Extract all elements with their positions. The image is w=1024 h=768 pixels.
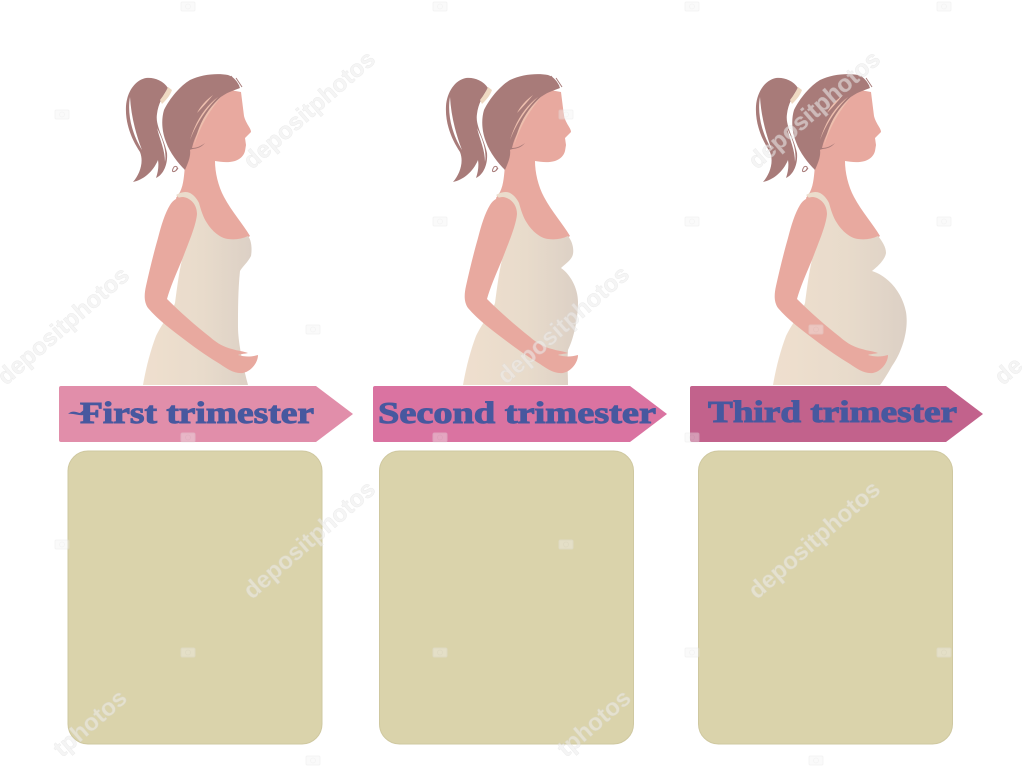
watermarks: depositphotos bbox=[743, 46, 886, 175]
panel: first trimester box bbox=[68, 451, 322, 744]
arrow: second trimester bbox=[373, 386, 667, 442]
watermarks: depositphotos bbox=[238, 46, 381, 175]
watermarks: tphotos bbox=[48, 684, 132, 763]
dress with small belly bbox=[463, 192, 578, 385]
figure: third trimester woman bbox=[756, 74, 907, 385]
panel: third trimester box bbox=[698, 451, 952, 744]
figure: second trimester woman bbox=[446, 74, 578, 385]
arrow: first trimester: First trimester bbox=[80, 395, 314, 430]
panel: second trimester box bbox=[380, 451, 634, 744]
watermarks: depositphotos bbox=[743, 476, 886, 605]
arrow: third trimester bbox=[690, 386, 983, 442]
dress bbox=[143, 192, 252, 385]
watermarks: depositphotos bbox=[238, 476, 381, 605]
figure: first trimester woman bbox=[126, 74, 258, 385]
watermarks: depositphotos bbox=[492, 261, 635, 390]
arrow: third trimester: Third trimester bbox=[708, 394, 957, 429]
dress with large belly bbox=[773, 192, 907, 385]
arrow: first trimester bbox=[59, 386, 353, 442]
watermarks: tphotos bbox=[552, 684, 636, 763]
arrow: second trimester: Second trimester bbox=[378, 395, 656, 430]
